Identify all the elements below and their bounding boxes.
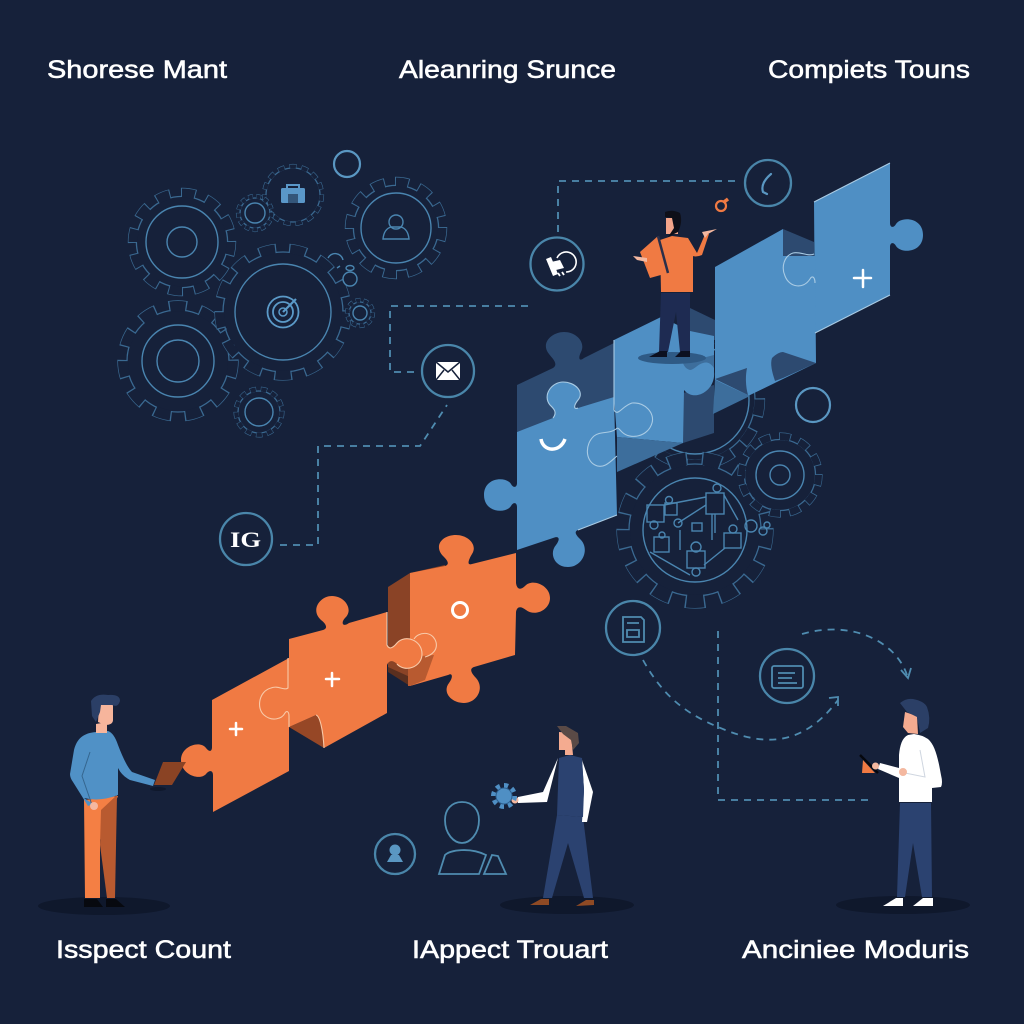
gear: small left of briefcase [238,196,272,230]
piece side: top of middle [783,229,814,262]
gear cluster: upper left [122,151,443,435]
arm shade [905,750,925,777]
laptop shadow [150,787,166,791]
leg right [100,795,117,898]
trousers [543,815,593,898]
white sleeves [518,758,593,822]
arm right [688,232,709,256]
leg left [84,796,118,898]
hair [665,211,681,237]
icon circle: document [606,601,660,655]
torso [660,236,693,292]
seam outlines [260,612,436,748]
shoes [530,899,594,906]
tab notch shade [683,355,714,370]
heading: top left: Shorese Mant [47,56,227,84]
dashed connectors [280,181,911,800]
shoes [649,351,690,357]
icon: refresh arc [541,439,565,449]
hair [557,726,579,750]
icon circle: hand [530,238,584,290]
network diagram [647,484,741,576]
shadow [500,896,634,914]
puzzle piece: orange lower [181,658,289,812]
under shade: orange tab [408,655,434,686]
heading: bottom right: Anciniee Moduris [742,936,969,964]
dark corner under step [388,667,410,686]
neck and face [96,705,113,733]
shadow [836,896,970,914]
person: right [836,699,970,914]
gear: user [349,181,443,275]
piece side: dark right of step [683,385,714,443]
icon: ring [452,602,468,618]
heading: top right: Compiets Touns [768,56,970,84]
shoes [84,899,125,907]
legs [659,293,690,352]
puzzle piece: person step [614,317,714,443]
small fragments [328,254,357,286]
gear: centre with target [219,248,347,376]
shoes [883,898,933,906]
puzzle: orange chain [181,535,550,812]
dark notch on middle piece [771,352,816,381]
hands [872,762,907,776]
side shade: top orange step [388,565,445,686]
head [666,218,678,234]
gear: medium right [741,436,819,514]
puzzle piece: lower blue [484,382,617,567]
icon circle: form [760,649,814,703]
heading: top centre: Aleanring Srunce [399,56,616,84]
device [862,760,875,773]
mid shade triangle under middle piece [713,380,750,414]
laptop [154,762,186,785]
hair [91,695,120,722]
dark triangle under middle piece [715,368,748,395]
hands [633,229,717,262]
person: top on puzzle [633,211,717,364]
hair [900,699,929,733]
puzzle piece: middle blue [715,229,816,396]
icon: plus middle [326,673,339,686]
shadow [638,352,706,364]
puzzle piece: orange middle [289,596,422,748]
piece side: dark top step [690,308,715,340]
icon circle: user [375,834,415,874]
gear: briefcase small teeth [264,166,322,224]
seam outlines [547,163,890,530]
hand [90,802,98,810]
sleeve line [82,752,92,805]
trousers [897,803,932,897]
puzzle: blue chain [484,163,923,567]
mid shade triangle under step [617,437,683,472]
folder [640,236,668,278]
icon: orange symbol [716,199,728,211]
vest [557,755,584,817]
sweater [70,731,155,806]
icon: plus on blue piece [854,270,871,287]
arrow: curve up [829,697,838,706]
small fragments right [745,520,770,535]
icon: briefcase [281,185,305,203]
gear icon [494,786,514,806]
icon circle: envelope [422,345,474,397]
icon: plus lower [230,723,242,735]
heading: bottom centre: IAppect Trouart [412,936,608,964]
gear: bottom small [236,389,282,435]
gear: large network [623,458,767,602]
gear: upper left large [132,192,232,292]
puzzle piece: orange top [410,535,550,703]
icon circle: IG: IG [230,527,261,552]
heading: bottom left: Isspect Count [56,936,231,964]
gear: lower left large [122,305,234,417]
ring: right [796,388,830,422]
icon: person outline [439,802,506,874]
face and neck [903,712,918,734]
piece shade: back of lower blue piece [517,332,614,432]
icon circle: phone [745,160,791,206]
person: left [38,695,186,915]
hand [512,796,518,804]
gear: tiny right [347,300,373,326]
puzzle piece: right blue [814,163,923,333]
sweater [878,734,942,802]
gear cluster: right, under puzzle [623,335,830,602]
neck and face [559,732,573,755]
ring: top [334,151,360,177]
icon circle: IG [220,513,272,565]
person: centre [494,726,634,914]
icon: target [268,296,298,328]
shadow [38,897,170,915]
arrow: curve down [901,668,911,678]
under shade: middle orange [289,715,324,748]
gear: upper, behind puzzle [630,335,760,465]
device edge [860,755,878,773]
